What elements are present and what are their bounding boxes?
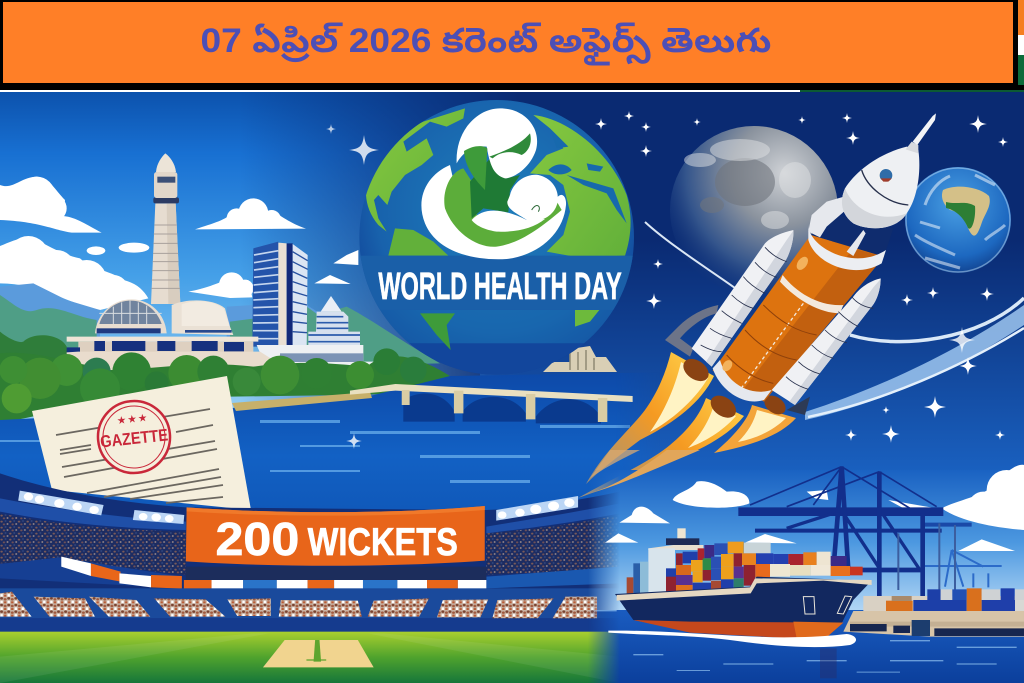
header bar bbox=[0, 0, 1024, 92]
buildings behind the globe bbox=[543, 346, 617, 372]
cricket field bbox=[0, 632, 620, 683]
left booster bbox=[692, 230, 793, 367]
interstage bbox=[811, 213, 893, 257]
stand wall bbox=[0, 618, 620, 635]
mowing stripes bbox=[0, 633, 620, 683]
floodlights bbox=[18, 491, 578, 524]
pitch bbox=[263, 640, 374, 667]
river water bbox=[0, 373, 630, 510]
cricket stadium bbox=[0, 473, 620, 683]
orbit trails bbox=[645, 222, 1024, 420]
clouds and city skyline bbox=[0, 153, 463, 423]
container stacks on ship bbox=[627, 528, 863, 595]
200 wickets banner: WICKETS bbox=[308, 520, 458, 564]
capsule bbox=[842, 113, 936, 228]
clouds over the city bbox=[0, 177, 358, 310]
world health day globe bbox=[350, 100, 643, 377]
port clouds bbox=[605, 465, 1024, 551]
globe title: WORLD HEALTH DAY bbox=[378, 265, 622, 308]
gazette stamp: ★ ★ ★ bbox=[117, 413, 148, 426]
moon bbox=[670, 126, 838, 294]
blue tier strips bbox=[0, 557, 182, 588]
right booster bbox=[772, 278, 881, 405]
crowd below banner bbox=[186, 567, 486, 581]
stepped pyramid building bbox=[257, 296, 378, 368]
container ship hull bbox=[615, 577, 872, 640]
rocket exhaust flames bbox=[578, 352, 796, 498]
roof bands bbox=[0, 498, 620, 533]
quay wall bbox=[843, 611, 1024, 637]
bow wave bbox=[608, 631, 856, 647]
domed hall bbox=[25, 299, 273, 372]
gazette stamp bbox=[94, 397, 174, 477]
trail remnants bbox=[590, 450, 700, 493]
ship reflection bbox=[820, 648, 837, 678]
stars bbox=[326, 111, 1008, 487]
upper crowd bbox=[0, 513, 620, 575]
200 wickets banner bbox=[186, 506, 485, 566]
gantry cranes bbox=[738, 467, 972, 610]
continents bbox=[361, 108, 633, 364]
high rise block bbox=[252, 242, 308, 347]
port scene bbox=[590, 450, 1024, 678]
launch fin bbox=[665, 305, 718, 357]
paper sheet bbox=[32, 376, 251, 510]
mother and child emblem bbox=[421, 108, 566, 259]
200 wickets banner: 200 bbox=[215, 513, 299, 565]
far mountains bbox=[0, 283, 320, 347]
minaret tower bbox=[151, 153, 180, 304]
green hills bbox=[0, 295, 440, 367]
rocket bbox=[665, 113, 936, 422]
port background sky and sea bbox=[560, 470, 1024, 683]
quay containers bbox=[863, 588, 1024, 613]
tricolour edge bbox=[1018, 0, 1024, 85]
distant crane bbox=[925, 550, 1002, 587]
orange title panel bbox=[3, 2, 1013, 83]
bridge bbox=[350, 384, 633, 423]
title text: 07 ఏప్రిల్ 2026 కరెంట్ అఫైర్స్ తెలుగు bbox=[200, 22, 772, 66]
lower stand bbox=[0, 588, 620, 618]
earth bbox=[905, 167, 1011, 273]
tree line bbox=[0, 332, 463, 423]
service struts bbox=[808, 197, 866, 256]
nozzles bbox=[679, 354, 789, 422]
core stage bbox=[713, 225, 886, 402]
slanted ribbon bbox=[61, 557, 182, 589]
gazette stamp: GAZETTE bbox=[99, 425, 169, 451]
lower crowd blocks bbox=[0, 592, 597, 620]
globe sphere bbox=[359, 100, 634, 375]
text lines bbox=[56, 409, 223, 503]
water highlights bbox=[597, 610, 1017, 673]
right fin bbox=[787, 397, 810, 415]
gazette document bbox=[32, 376, 251, 510]
stand structure bbox=[0, 473, 620, 623]
flag strip bbox=[184, 580, 486, 590]
